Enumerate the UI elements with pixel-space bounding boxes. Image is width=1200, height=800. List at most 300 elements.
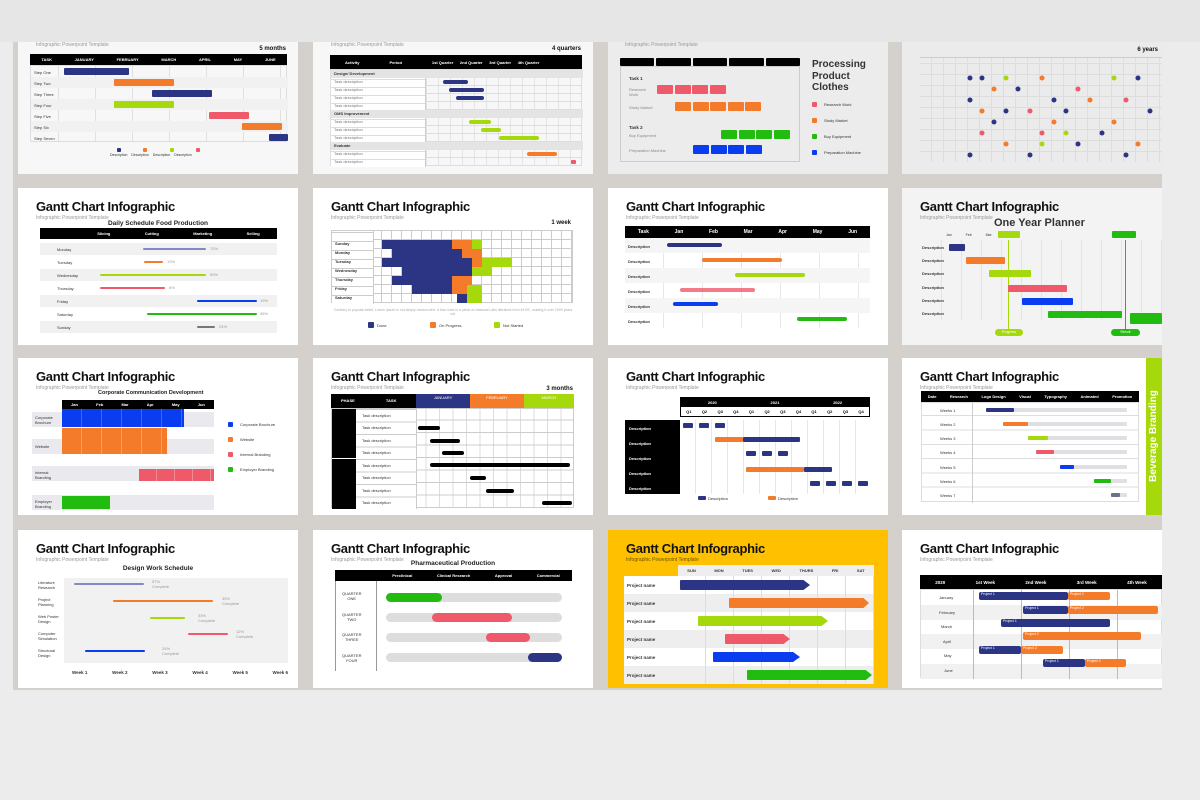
table: Design/ Development [334, 71, 375, 76]
header: 2020 [935, 580, 945, 584]
slide r1c3: Processing product clothes [608, 42, 888, 174]
heading: Processing Product Clothes: Processing [812, 59, 866, 70]
header: Marketing [193, 231, 212, 236]
rows: Step One [34, 70, 51, 75]
slide r3c2: 3 months phases [313, 358, 593, 515]
header: 3rd Week [1077, 580, 1097, 584]
slide r3c1: corporate communication [18, 358, 298, 515]
chart: Week 2 [112, 670, 128, 675]
header: Logo Design [981, 394, 1006, 399]
chart: Complete [198, 618, 215, 623]
subtitle: Infographic Powerpoint Template [920, 557, 993, 563]
pill: Result [1111, 329, 1140, 336]
subtitle: Infographic Powerpoint Template [626, 215, 699, 221]
header: Feb [96, 402, 103, 407]
legend [228, 422, 275, 472]
body: Task description [362, 450, 391, 455]
rows: 24% [219, 324, 227, 329]
grid: Friday [335, 286, 347, 291]
pill: Result: Result [1121, 330, 1130, 334]
header: Cutting [145, 231, 159, 236]
legend: Done [377, 323, 387, 328]
title: Gantt Chart Infographic [36, 369, 175, 384]
legend [698, 496, 798, 501]
header: Q1 [686, 409, 692, 414]
body [331, 408, 574, 508]
chart: Design [38, 653, 50, 658]
heading: One Year Planner: One Year Planner [994, 217, 1085, 229]
table: Weeks 6 [940, 479, 956, 484]
header [921, 391, 1139, 402]
chart grid and bars: Description [922, 298, 944, 303]
blocks: Website [35, 444, 49, 449]
blocks: Employer [35, 499, 52, 504]
rows: Step Seven [34, 136, 55, 141]
chart: Week 6 [273, 670, 288, 675]
table: February [939, 610, 955, 615]
header: Q2 [827, 409, 832, 414]
subtitle: Infographic Powerpoint Template [36, 385, 109, 391]
header: FEBRUARY [117, 57, 139, 62]
header [331, 394, 574, 408]
day header: MON [714, 568, 724, 573]
header [30, 54, 287, 65]
rows: Description [628, 244, 650, 249]
header: Date [928, 394, 936, 399]
grid: Saturday [335, 295, 352, 300]
chart box: Preparation Machine [629, 148, 666, 153]
legend: Research Work [824, 102, 852, 107]
header [62, 400, 214, 409]
label: 5 months: 5 months [259, 46, 286, 52]
table: March [941, 624, 952, 629]
legend: Description [708, 496, 728, 501]
title: Gantt Chart Infographic [920, 369, 1059, 384]
table: Project 1 [1003, 619, 1017, 623]
subtitle: Infographic Powerpoint Template [625, 42, 698, 48]
chart: Computer [38, 631, 56, 636]
title: Gantt Chart Infographic [626, 369, 765, 384]
chart heading: Corporate Communication Development [98, 390, 203, 396]
month header: Jan Feb Mar [946, 233, 992, 237]
chart: Complete [162, 651, 179, 656]
rows: ONE [347, 596, 356, 601]
blocks [32, 409, 214, 510]
body: Task description [362, 425, 391, 430]
chart: Project [38, 597, 50, 602]
slide r4c3: yellow weekly gantt [608, 530, 888, 688]
table: Project 2 [1070, 592, 1084, 596]
header: JANUARY [434, 395, 452, 400]
header: Q1 [749, 409, 754, 414]
header: Q3 [843, 409, 848, 414]
header: TASK [41, 57, 52, 62]
legend: Buy Equipment [824, 134, 851, 139]
header: Q4 [858, 409, 864, 414]
label: 4 quarters: 4 quarters [552, 46, 581, 52]
chart heading: Daily Schedule Food Production [108, 220, 208, 227]
grid: Tuesday [335, 259, 351, 264]
header: PHASE TASK [341, 398, 396, 403]
body: Task description [362, 463, 391, 468]
table: Project name [627, 673, 655, 678]
table: Weeks 1 [940, 408, 956, 413]
header: Clinical Research [437, 573, 470, 578]
table [624, 576, 874, 684]
rows: THREE [345, 637, 359, 642]
table: Weeks 7 [940, 493, 956, 498]
subtitle: Infographic Powerpoint Template [920, 385, 993, 391]
rows [335, 581, 572, 671]
chart: Complete [236, 634, 253, 639]
header: Apr [147, 402, 154, 407]
chart: Literature [38, 580, 55, 585]
header: Q4 [796, 409, 801, 414]
legend [812, 102, 861, 155]
header [680, 397, 870, 417]
body: Task description [362, 488, 391, 493]
header: May [172, 402, 180, 407]
rows: 36% [260, 311, 268, 316]
header: MAY [234, 57, 242, 62]
table: Project 2 [1070, 606, 1084, 610]
chart: Structural [38, 648, 55, 653]
header: Approval [495, 573, 512, 578]
rows: Step Four [34, 103, 52, 108]
left label column: Description [629, 456, 651, 461]
table: Task description [334, 127, 363, 132]
slide r2c4: one year planner [902, 188, 1162, 345]
heading: Processing Product Clothes: Product [812, 70, 850, 82]
chart: Week 1 [72, 670, 87, 675]
header: Task [638, 229, 649, 235]
slide r1c1: 5 months gantt [18, 42, 298, 174]
title: Gantt Chart Infographic [331, 541, 470, 556]
rows: QUARTER [342, 632, 361, 637]
slide r1c2: 4 quarters [313, 42, 593, 174]
legend: Corporate Brochure [240, 422, 275, 427]
table: Weeks 3 [940, 436, 956, 441]
rows: Step Five [34, 114, 51, 119]
subtitle: Infographic Powerpoint Template [36, 215, 109, 221]
header: JUNE [265, 57, 276, 62]
chart: 57% [152, 579, 160, 584]
chart: Complete [152, 584, 169, 589]
header [920, 575, 1162, 589]
header: May [813, 229, 822, 235]
day header: FRI [832, 568, 838, 573]
table: Task description [334, 87, 363, 92]
table [921, 402, 1139, 502]
header: Jun [198, 402, 205, 407]
chart grid and bars: Description [922, 285, 944, 290]
rows: Friday [57, 299, 68, 304]
rows: Step Six [34, 125, 49, 130]
grid: Wednesday [335, 268, 357, 273]
slide r4c2: pharmaceutical production [313, 530, 593, 688]
label: 6 years: 6 years [1137, 47, 1158, 53]
chart heading: Pharmaceutical Production [411, 560, 495, 567]
subtitle: Infographic Powerpoint Template [626, 385, 699, 391]
header [330, 55, 582, 69]
table: Project 2 [1087, 659, 1101, 663]
day header: WED [772, 568, 781, 573]
left label column: Description [629, 486, 651, 491]
rows: QUARTER [342, 591, 361, 596]
rows: Description [628, 319, 650, 324]
rows: 50% [210, 272, 218, 277]
header: Selling [247, 231, 260, 236]
table: April [943, 639, 951, 644]
header [40, 228, 277, 239]
slide r2c2: 1 week grid [313, 188, 593, 345]
side strip: Beverage Branding: Beverage Branding [1148, 390, 1159, 482]
rows: QUARTER [342, 612, 361, 617]
rows: 13% [167, 259, 175, 264]
rows: Thursday [57, 286, 74, 291]
chart box: Task 2 [629, 125, 643, 130]
chart: 35% [222, 596, 230, 601]
table [330, 69, 582, 166]
table: Project 1 [981, 646, 995, 650]
chart grid and bars [922, 240, 1162, 320]
table: Project name [627, 601, 655, 606]
header: Q4 [733, 409, 738, 414]
table: Project 2 [1025, 632, 1039, 636]
header: Period [389, 60, 402, 64]
header: Q2 [702, 409, 707, 414]
table: May [944, 653, 952, 658]
header: Jan [675, 229, 683, 235]
header: MARCH [542, 395, 556, 400]
title: Gantt Chart Infographic [626, 541, 765, 556]
header: Mar [744, 229, 753, 235]
header: Typography [1044, 394, 1067, 399]
header: MARCH [161, 57, 176, 62]
header: Activity [345, 60, 359, 64]
chart heading: Design Work Schedule [123, 565, 193, 572]
blocks: Corporate [35, 415, 53, 420]
table: Task description [334, 159, 363, 164]
chart: 12% [236, 629, 244, 634]
table: Project name [627, 655, 655, 660]
grid: Sunday [335, 241, 349, 246]
chart grid and bars: Description [922, 258, 944, 263]
slide r2c3: month gantt [608, 188, 888, 345]
header: Jan [71, 402, 78, 407]
table: Task description [334, 135, 363, 140]
rows: Monday [57, 247, 71, 252]
rows: Tuesday [57, 260, 72, 265]
table: Weeks 2 [940, 422, 956, 427]
subtitle: Infographic Powerpoint Template [331, 215, 404, 221]
header [620, 58, 800, 66]
legend: Preparation Machine [824, 150, 861, 155]
header: Commercial [537, 573, 560, 578]
header: APRIL [199, 57, 211, 62]
label: 1 week: 1 week [551, 220, 571, 226]
chart box: Work [629, 92, 638, 97]
day header: SAT [857, 568, 865, 573]
header: Research [950, 394, 968, 399]
table: Task description [334, 151, 363, 156]
table: Task description [334, 103, 363, 108]
chart: Design [38, 619, 50, 624]
rows [625, 238, 870, 328]
pill: Progress [995, 329, 1023, 336]
header: 2020 [708, 400, 717, 405]
header: Promotion [1112, 394, 1132, 399]
table: Project 1 [1045, 659, 1059, 663]
table: Task description [334, 95, 363, 100]
subtitle: Infographic Powerpoint Template [36, 557, 109, 563]
chart box: Research [629, 87, 646, 92]
header: Q1 [811, 409, 817, 414]
table: Task description [334, 79, 363, 84]
table: Project name [627, 583, 655, 588]
chart: Planning [38, 602, 54, 607]
rows: Wednesday [57, 273, 78, 278]
chart grid and bars: Description [922, 311, 944, 316]
table: Weeks 5 [940, 465, 956, 470]
chart grid and bars: Description [922, 245, 944, 250]
legend: Not Started [503, 323, 523, 328]
rows [40, 243, 277, 333]
pill: Progress: Progress [1002, 330, 1016, 334]
chart: Complete [222, 601, 239, 606]
chart [38, 578, 288, 675]
slide r4c4: monthly projects [902, 530, 1162, 688]
chart: Week 4 [192, 670, 208, 675]
table: Project name [627, 619, 655, 624]
body: Task description [362, 475, 391, 480]
top band [0, 0, 1200, 42]
header: 2nd Week [1025, 580, 1046, 584]
left label column: Description [629, 441, 651, 446]
table: Project 1 [981, 592, 995, 596]
header: Animated [1080, 394, 1099, 399]
chart: Simulation [38, 636, 57, 641]
header: Apr [778, 229, 787, 235]
chart: Research [38, 585, 55, 590]
subtitle: Infographic Powerpoint Template [920, 215, 993, 221]
table [920, 589, 1162, 678]
legend: Internal Branding [240, 452, 270, 457]
label: 3 months: 3 months [546, 386, 573, 392]
header: Visual [1019, 394, 1031, 399]
table: Project name [627, 637, 655, 642]
title: Gantt Chart Infographic [626, 199, 765, 214]
backdrop: mockup board [13, 42, 1162, 690]
chart: Week 3 [152, 670, 168, 675]
chart box: Task 1 [629, 76, 643, 81]
day header [678, 565, 874, 576]
blocks: Branding [35, 504, 51, 509]
chart: Web Poster [38, 614, 59, 619]
slide r1c4: 6 years dot grid [902, 42, 1162, 174]
chart: 33% [198, 613, 206, 618]
header: Jun [848, 229, 857, 235]
chart: Week 5 [232, 670, 248, 675]
title: Gantt Chart Infographic [36, 199, 175, 214]
table: Task description [334, 119, 363, 124]
body: Task description [362, 438, 391, 443]
table: January [939, 595, 953, 600]
rows [30, 65, 287, 142]
rows: 70% [210, 246, 218, 251]
header: Q2 [764, 409, 770, 414]
rows: Description [628, 304, 650, 309]
side strip: Beverage Branding [1146, 358, 1162, 515]
blocks: Branding [35, 475, 51, 480]
blocks: Brochure [35, 420, 51, 425]
chart: 24% [162, 646, 170, 651]
table: Project 2 [1023, 646, 1037, 650]
table: Project 1 [1025, 606, 1039, 610]
chart box: Buy Equipment [629, 133, 656, 138]
header: 2022 [833, 400, 842, 405]
slide r4c1: design work schedule [18, 530, 298, 688]
rows: Description [628, 259, 650, 264]
header: Q3 [717, 409, 723, 414]
rows: 19% [260, 298, 268, 303]
legend: Description [778, 496, 798, 501]
rows: Saturday [57, 312, 73, 317]
legend: Website [240, 437, 254, 442]
table: Weeks 4 [940, 450, 956, 455]
header [625, 226, 870, 238]
header: 4th Week [1127, 580, 1147, 584]
title: Gantt Chart Infographic [36, 541, 175, 556]
slide r3c3: quarters 2020-2022 [608, 358, 888, 515]
day header: THURS [799, 568, 813, 573]
grid: Thursday [335, 277, 353, 282]
header: Preclinical [392, 573, 412, 578]
legend: Employer Branding [240, 467, 274, 472]
title: Gantt Chart Infographic [920, 541, 1059, 556]
header: JANUARY [75, 57, 94, 62]
heading: Processing Product Clothes [812, 59, 866, 93]
left label column [625, 420, 680, 494]
chart box: Study Market [629, 105, 653, 110]
header: 1st Quarter 2nd Quarter 3rd Quarter 4th Quarter [432, 60, 539, 64]
header: Q3 [780, 409, 785, 414]
header: 2021 [771, 400, 779, 405]
rows: Description [628, 274, 650, 279]
title: Gantt Chart Infographic [331, 369, 470, 384]
rows: Description [628, 289, 650, 294]
header: 1st Week [976, 580, 995, 584]
legend: On Progress [439, 323, 461, 328]
blocks: Internal [35, 470, 48, 475]
header [335, 570, 572, 581]
rows: Sunday [57, 325, 71, 330]
header: Mar [121, 402, 129, 407]
rows: TWO [347, 617, 356, 622]
grid [331, 230, 573, 303]
header: FEBRUARY [486, 395, 508, 400]
left label column: Description [629, 426, 651, 431]
rows: QUARTER [342, 653, 361, 658]
chart grid and bars: Description [922, 271, 944, 276]
subtitle: Infographic Powerpoint Template [626, 557, 699, 563]
legend: Study Market [824, 118, 848, 123]
title: Gantt Chart Infographic [331, 199, 470, 214]
table: OMS Improvement [334, 111, 369, 116]
rows: 6% [169, 285, 175, 290]
slide r3c4: beverage branding [902, 358, 1162, 515]
caption: Contrary to popular belief, Lorem Ipsum is not simply random text. It has roots in a piece of classical Latin literature from 45 BC, making it over 2000 years old. [334, 308, 572, 316]
